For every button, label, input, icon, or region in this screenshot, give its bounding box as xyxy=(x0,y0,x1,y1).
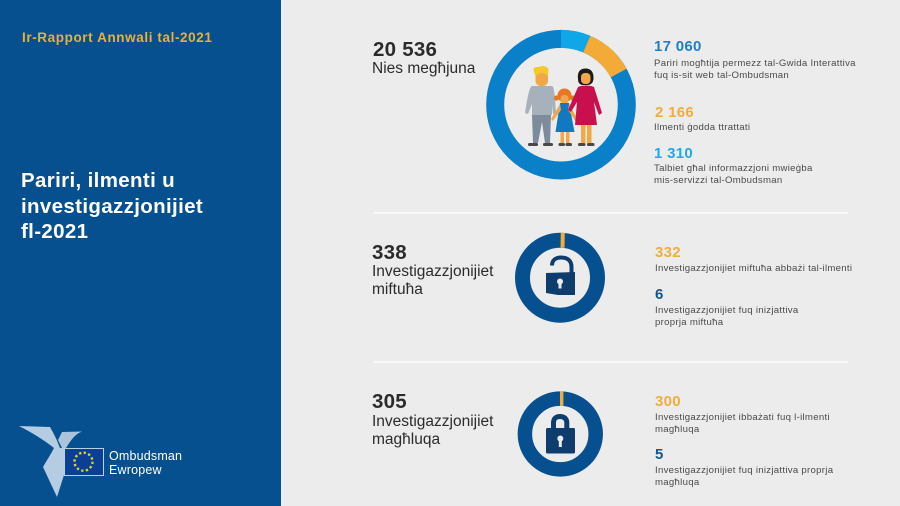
stat: 1 310 requests xyxy=(654,145,813,186)
chart: closed investigations donut xyxy=(525,391,596,469)
opened total: 338 xyxy=(372,241,407,264)
stat: 2 166 complaints: 2 166 xyxy=(655,104,694,121)
closed label: Investigazzjonijiet xyxy=(372,413,493,430)
stat: 6 opened: proprja miftuħa xyxy=(655,317,723,328)
stat: 1 310 requests: Talbiet għal informazzjoni mwieġba xyxy=(654,163,813,174)
section: opened investigations xyxy=(372,241,494,298)
stat: 2 166 complaints: Ilmenti ġodda ttrattati xyxy=(654,122,750,133)
total label: Nies megħjuna xyxy=(372,60,475,77)
section: closed investigations xyxy=(372,390,494,448)
report title: Ir-Rapport Annwali tal-2021 xyxy=(22,30,212,45)
panel: left sidebar xyxy=(0,0,281,506)
opened label xyxy=(372,263,494,298)
child xyxy=(551,88,578,146)
stat: 332 opened: Investigazzjonijiet miftuħa abbażi tal-ilmenti xyxy=(655,263,852,274)
chart: opened investigations donut xyxy=(522,233,598,315)
closed total: 305 xyxy=(372,390,407,413)
opened label: miftuħa xyxy=(372,281,423,298)
stat: 300 closed: magħluqa xyxy=(655,424,699,435)
total number: 20 536 xyxy=(373,38,437,61)
main heading xyxy=(21,169,203,243)
stat: 332 opened xyxy=(655,244,852,274)
icon: open padlock xyxy=(546,258,575,295)
section: advice stats xyxy=(372,38,476,77)
stat: 300 closed: Investigazzjonijiet ibbażati fuq l-ilmenti xyxy=(655,412,830,423)
stat: 5 closed: magħluqa xyxy=(655,477,699,488)
logo wordmark: Ombudsman xyxy=(109,449,182,463)
stat: 6 opened xyxy=(655,286,798,328)
stat: 5 closed: Investigazzjonijiet fuq inizjattiva proprja xyxy=(655,465,833,476)
stat: 17 060 advice: Pariri mogħtija permezz tal-Gwida Interattiva xyxy=(654,58,856,69)
stat: 1 310 requests: 1 310 xyxy=(654,145,693,162)
closed label: magħluqa xyxy=(372,431,440,448)
stat: 300 closed: 300 xyxy=(655,393,681,410)
stat: 6 opened: 6 xyxy=(655,286,664,303)
icon: EU flag xyxy=(64,448,104,476)
stat: 5 closed: 5 xyxy=(655,446,664,463)
logo wordmark line 2: Ewropew xyxy=(109,463,162,477)
closed label xyxy=(372,413,494,448)
icon: bird mark xyxy=(19,426,82,497)
man xyxy=(525,66,556,146)
main heading: Pariri, ilmenti u xyxy=(21,169,175,192)
opened label: Investigazzjonijiet xyxy=(372,263,493,280)
logo: European Ombudsman xyxy=(19,426,182,497)
icon: closed padlock xyxy=(546,416,575,454)
stat: 332 opened: 332 xyxy=(655,244,681,261)
stat: 6 opened: Investigazzjonijiet fuq inizjattiva xyxy=(655,305,798,316)
divider xyxy=(373,361,848,363)
stat: 17 060 advice: 17 060 xyxy=(654,38,702,55)
main heading: investigazzjonijiet xyxy=(21,194,203,218)
stat: 5 closed xyxy=(655,446,834,488)
icon: family xyxy=(525,66,602,146)
stat: 1 310 requests: mis-servizzi tal-Ombudsman xyxy=(654,175,783,186)
stat: 2 166 complaints xyxy=(654,104,750,133)
divider xyxy=(373,212,848,214)
stat: 17 060 advice: fuq is-sit web tal-Ombudsman xyxy=(654,70,789,81)
stat: 17 060 advice xyxy=(654,38,856,81)
main heading: fl-2021 xyxy=(21,220,88,243)
woman xyxy=(568,68,602,146)
stat: 300 closed xyxy=(655,393,830,435)
